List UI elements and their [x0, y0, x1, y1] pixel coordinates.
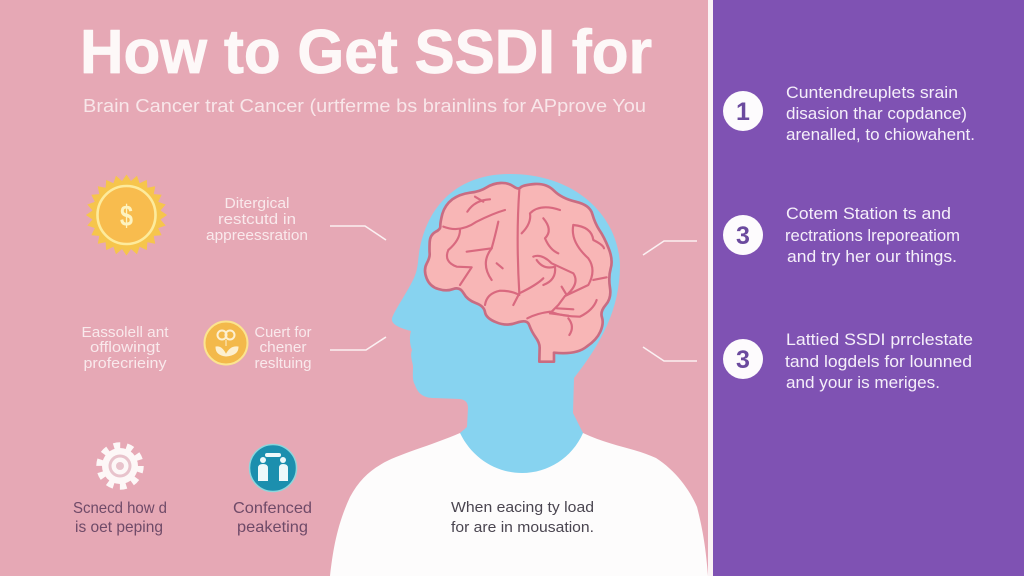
text block: middle centre label: resltuing: [254, 355, 312, 372]
text block: bottom left label: [73, 500, 167, 536]
step 1 badge: [723, 91, 763, 131]
step 1 text: disasion thar copdance): [786, 104, 967, 123]
connector: bottom right: [643, 347, 697, 361]
connector: top right: [643, 241, 697, 255]
step 2 badge: [723, 215, 763, 255]
icon: white gear: [100, 446, 140, 486]
connector: top left: [330, 226, 386, 240]
step 3 badge: [723, 339, 763, 379]
text block: shirt caption: [451, 499, 594, 536]
text block: top left label: appreessration: [206, 227, 308, 244]
icon: gold dollar coin: $: [120, 200, 133, 233]
brain folds: [443, 190, 607, 335]
text block: top left label: restcutd in: [218, 211, 296, 228]
step 2 badge: 3: [736, 222, 750, 250]
text block: middle left label: Eassolell ant: [82, 324, 169, 341]
step 2 text: rectrations lreporeatiom: [785, 226, 960, 245]
illustration: head silhouette: [392, 174, 620, 473]
icon: teal people: [250, 444, 296, 492]
step 1 text: arenalled, to chiowahent.: [786, 125, 975, 144]
text block: middle centre label: chener: [260, 339, 306, 356]
step 2 text: and try her our things.: [787, 247, 957, 266]
text block: top left label: Ditergical: [224, 195, 290, 212]
text block: middle left label: offlowingt: [90, 339, 161, 356]
step 3 text: Lattied SSDI prrclestate: [786, 330, 973, 349]
text block: middle centre label: [254, 324, 312, 372]
illustration: shirt: [330, 433, 708, 576]
step 1 badge: 1: [736, 98, 750, 126]
step 3 text: [785, 330, 973, 392]
text block: bottom centre label: Confenced: [233, 500, 312, 517]
text block: middle left label: [82, 324, 169, 372]
step 1 text: [786, 83, 975, 144]
step 3 text: tand logdels for lounned: [785, 352, 972, 371]
step 1 text: Cuntendreuplets srain: [786, 83, 958, 102]
panel: pink background: [0, 0, 708, 576]
connector: middle left: [330, 337, 386, 350]
step 2 text: Cotem Station ts and: [786, 204, 951, 223]
text block: shirt caption: When eacing ty load: [451, 499, 594, 516]
text block: shirt caption: for are in mousation.: [451, 519, 594, 536]
illustration: brain: [425, 183, 612, 362]
step 2 text: [785, 204, 960, 266]
text block: bottom left label: is oet peping: [75, 519, 163, 536]
text block: bottom left label: Scnecd how d: [73, 500, 167, 517]
step 3 text: and your is meriges.: [786, 373, 940, 392]
title: How to Get SSDI for: [80, 18, 652, 87]
text block: middle left label: profecrieiny: [84, 355, 167, 372]
subtitle: Brain Cancer trat Cancer (urtferme bs brainlins for APprove You: [83, 96, 646, 116]
text block: middle centre label: Cuert for: [254, 324, 312, 341]
text block: top left label: [206, 195, 308, 244]
icon: gold dollar coin: [86, 174, 167, 256]
text block: bottom centre label: [233, 500, 312, 536]
step 3 badge: 3: [736, 346, 750, 374]
text block: bottom centre label: peaketing: [237, 519, 308, 536]
panel: purple sidebar: [708, 0, 1024, 576]
icon: gold hands and heart: [204, 322, 248, 364]
